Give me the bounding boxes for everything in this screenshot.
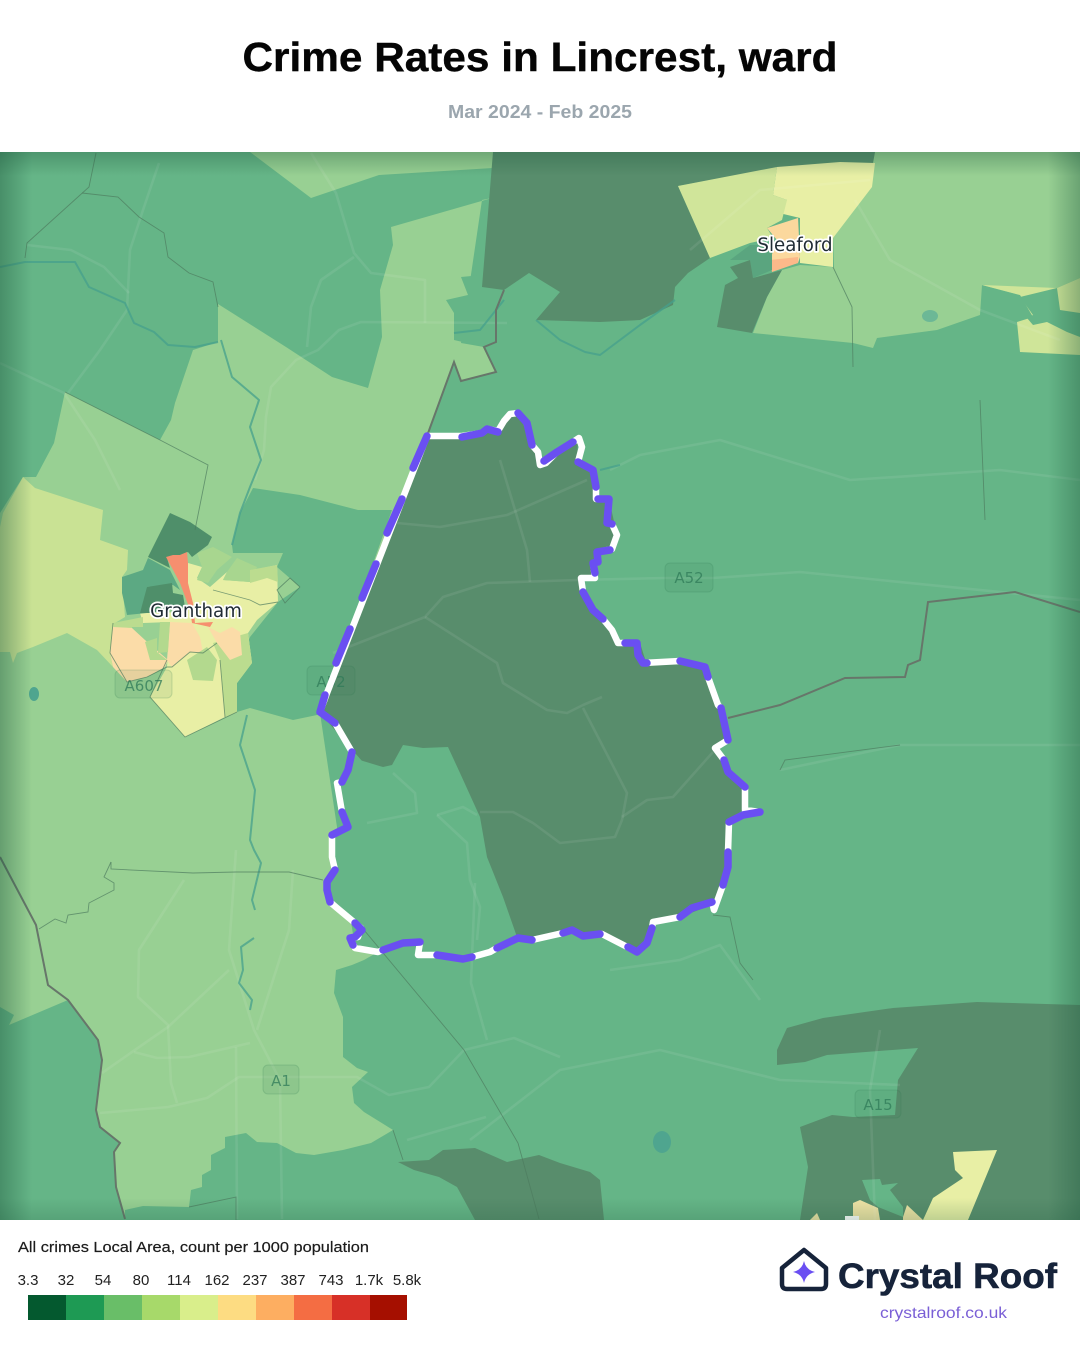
dark green region north [482,152,875,322]
mid-green island by the boundary [446,276,471,342]
road label: A607 [115,670,172,698]
legend values: 1.7k [355,1272,384,1289]
rivers [0,262,938,1153]
legend [18,1239,422,1320]
subtitle: date range: Mar 2024 - Feb 2025 [448,102,632,122]
road label: A15: A15 [863,1096,893,1114]
light green west region [0,198,496,1219]
legend values: 3.3 [18,1272,38,1289]
ward boundary: purple dashes [320,413,760,959]
legend values: 237 [242,1272,268,1289]
logo: Crystal Roof [782,1250,1057,1322]
map edge vignette [0,152,1080,1220]
east ward patches near the right edge [982,278,1080,355]
light green region north-east [753,152,1080,348]
legend values: 5.8k [393,1272,422,1289]
Sleaford wards [678,162,875,333]
road label: A52 west [307,666,355,695]
road label: A607: A607 [125,677,163,695]
legend values: 114 [167,1272,191,1289]
place label: Sleaford: Sleaford [757,235,833,256]
south-east dark green region [777,1002,1080,1220]
legend values: 743 [318,1272,344,1289]
district boundaries [0,153,1080,1220]
mid-green area east of Grantham [232,488,392,720]
legend values: 54 [95,1272,111,1289]
light green top strip [250,152,493,198]
road label: A1: A1 [271,1072,291,1090]
yellow-green ward west of Grantham [0,477,128,667]
legend title: All crimes Local Area, count per 1000 population [18,1239,369,1256]
south dark green region [398,1148,604,1220]
road label: A15 [855,1090,901,1118]
wordmark: Crystal Roof [838,1257,1057,1296]
map panel [0,152,1080,1220]
road label: A52 west: A52 [316,673,346,691]
website: crystalroof.co.uk [880,1305,1008,1322]
ward fill: lower-left mid-green area [330,745,516,936]
place label: Grantham: Grantham [150,601,242,622]
map base: mid-green areas [0,152,1080,1220]
legend values: 32 [58,1272,74,1289]
legend values: 387 [280,1272,306,1289]
legend values: 80 [133,1272,149,1289]
title: Crime Rates in Lincrest, ward [242,34,838,80]
road label: A1 [263,1065,299,1094]
Grantham wards [110,513,300,737]
ward boundary: white line [320,413,760,959]
roads [0,153,1080,1220]
road label: A52 east: A52 [674,569,704,587]
legend values [18,1272,422,1289]
south-east town wards [810,1150,997,1220]
legend values: 162 [204,1272,230,1289]
road label: A52 east [665,563,713,592]
icon: house with star [782,1250,826,1289]
legend colour scale [28,1295,407,1320]
ward fill: Lincrest dark area [320,414,745,952]
